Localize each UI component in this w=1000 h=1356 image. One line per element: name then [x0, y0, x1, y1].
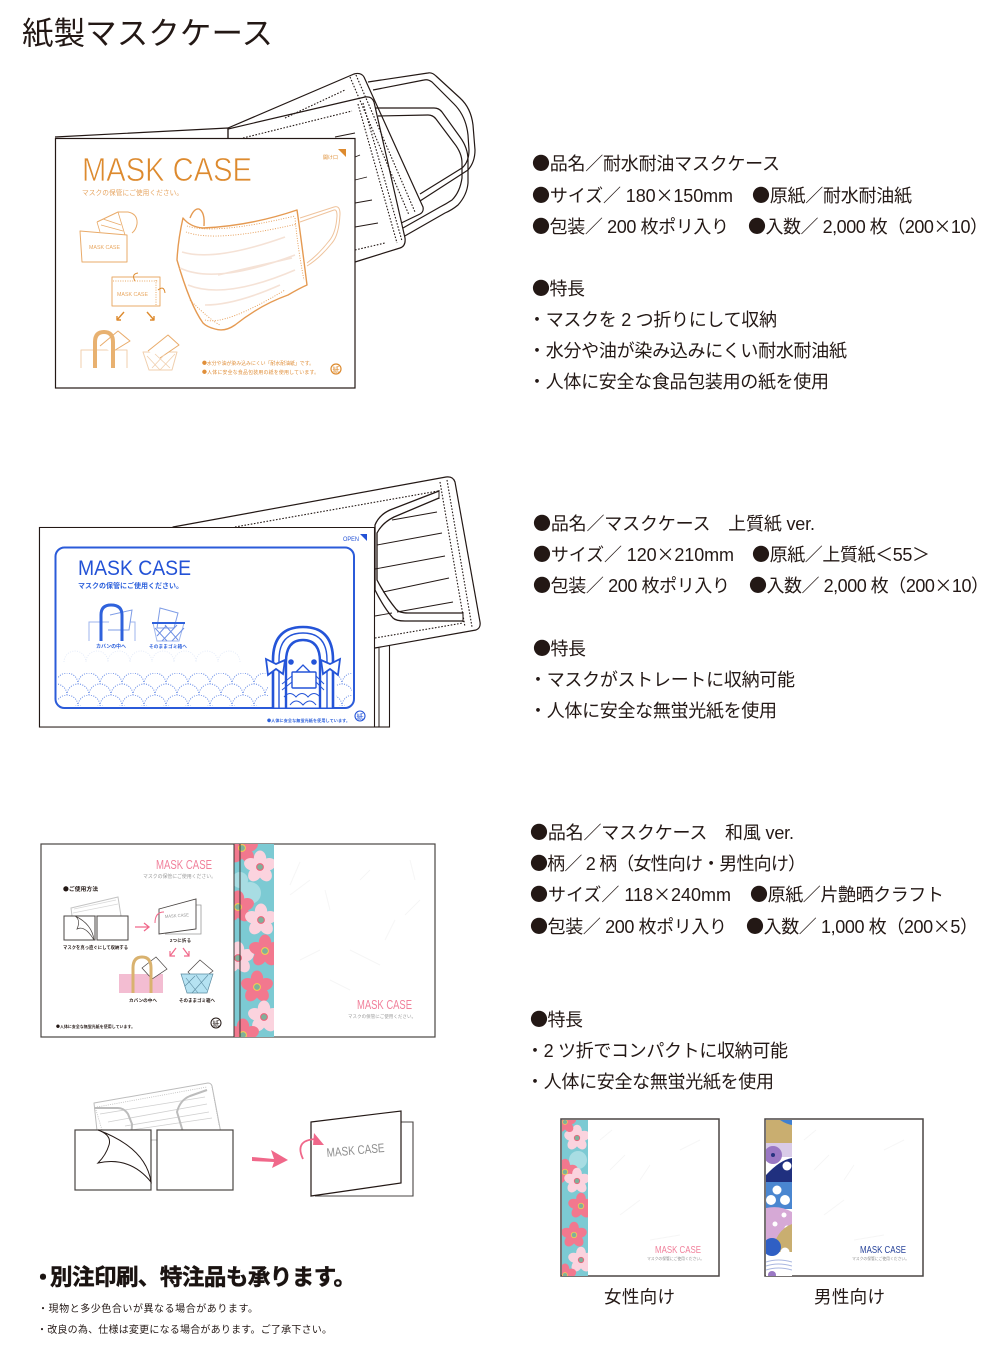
right sleeve [157, 1130, 233, 1190]
heading: MASK CASE (left): MASK CASE [156, 858, 212, 872]
section 1 illustration: waterproof mask case: MASK CASE [89, 245, 121, 251]
footnote: ●人体に安全な無蛍光紙を使用しています。 [267, 717, 350, 724]
how-to captions: マスクを真っ直ぐにして収納する [63, 944, 128, 951]
recycle mark: 紙 [212, 1019, 220, 1028]
back masks [55, 73, 475, 262]
bag icon [89, 605, 185, 641]
open label [343, 534, 367, 543]
section 2 specifications: ●入数／ 2,000 枚（200×10） [749, 572, 989, 598]
footnotes: ●人体に安全な食品包装用の紙を使用しています。 [202, 369, 319, 376]
recycle mark: 紙 [332, 365, 340, 374]
section 3 specifications: ●サイズ／ 118×240mm [530, 881, 731, 907]
bag captions: そのままゴミ箱へ [149, 643, 187, 650]
section 1 illustration: waterproof mask case [55, 73, 475, 388]
footnotes [202, 360, 319, 376]
disclaimers: ・改良の為、仕様は変更になる場合があります。ご了承下さい。 [37, 1323, 332, 1336]
section 1 specifications: ・マスクを 2 つ折りにして収納 [528, 310, 777, 330]
section 2 specifications: ●原紙／上質紙＜55＞ [752, 541, 930, 567]
disclaimers [37, 1302, 332, 1336]
section 1 specifications [528, 150, 988, 392]
heading: MASK CASE (right): MASK CASE [357, 998, 412, 1012]
section 2 specifications: ・マスクがストレートに収納可能 [529, 670, 795, 690]
section 3 specifications: ●特長 [530, 1006, 583, 1032]
mask behind case [173, 477, 480, 648]
section 3 specifications: ●原紙／片艶晒クラフト [750, 881, 944, 907]
how-to heading: ●ご使用方法 [63, 884, 98, 893]
how-to diagrams [64, 897, 213, 993]
arrow [252, 1150, 288, 1168]
women's version card: マスクの保管にご使用ください。 [647, 1256, 704, 1261]
how-to diagrams: MASK CASE [165, 912, 189, 919]
order note: 別注印刷、特注品も承ります。 [50, 1265, 356, 1290]
washi fibers [290, 860, 420, 990]
subheading: マスクの保管にご使用ください。 [78, 581, 183, 590]
section 2 specifications: ●サイズ／ 120×210mm [533, 541, 734, 567]
subheading (right): マスクの保管にご使用ください。 [348, 1013, 416, 1020]
disclaimers: ・現物と多少色合いが異なる場合があります。 [38, 1302, 258, 1315]
section 3 illustration: washi case open sheet [40, 843, 436, 1038]
section 3 specifications: ●包装／ 200 枚ポリ入り [530, 913, 727, 939]
section 1 specifications: ●入数／ 2,000 枚（200×10） [748, 213, 988, 239]
women's version card: MASK CASE [655, 1245, 701, 1256]
section 1 specifications: ・人体に安全な食品包装用の紙を使用 [528, 372, 829, 392]
amabie character [266, 627, 340, 708]
women's caption: 女性向け [604, 1287, 675, 1307]
section 2 specifications: ●包装／ 200 枚ポリ入り [533, 572, 730, 598]
open label: 開け口 [323, 155, 338, 161]
section 2 specifications [529, 510, 989, 721]
section 3 specifications: ・人体に安全な無蛍光紙を使用 [526, 1072, 774, 1092]
section 3 specifications: ●柄／ 2 柄（女性向け・男性向け） [530, 850, 806, 876]
folding diagram [75, 1083, 413, 1196]
folded case: MASK CASE [326, 1141, 385, 1160]
section 1 specifications: ●包装／ 200 枚ポリ入り [532, 213, 729, 239]
how-to captions: カバンの中へ [129, 997, 157, 1004]
bag captions [96, 643, 187, 650]
how-to captions: ●人体に安全な無蛍光紙を使用しています。 [56, 1024, 135, 1030]
grey mask [94, 1083, 222, 1142]
peeled corner [98, 1130, 151, 1182]
section 3 specifications: ●入数／ 1,000 枚（200×5） [746, 913, 978, 939]
folded case [300, 1111, 413, 1196]
how-to captions [56, 937, 216, 1030]
flower strip [234, 844, 274, 1037]
section 1 illustration: waterproof mask case: MASK CASE [117, 292, 149, 298]
left sleeve [75, 1130, 151, 1190]
case front [40, 528, 374, 727]
section 1 specifications: ●原紙／耐水耐油紙 [752, 182, 912, 208]
scallop pattern [58, 651, 352, 706]
order note: ・ [32, 1265, 54, 1290]
section 2 specifications: ●特長 [533, 635, 586, 661]
men's version card: マスクの保管にご使用ください。 [852, 1256, 909, 1261]
small how-to illustrations [80, 212, 179, 370]
blue frame [56, 548, 354, 708]
subheading: マスクの保管にご使用ください。 [82, 188, 183, 197]
case front [56, 138, 355, 388]
men's version card [763, 1119, 923, 1279]
open label [323, 149, 346, 161]
section 2 specifications: ●品名／マスクケース 上質紙 ver. [533, 510, 815, 536]
bag captions: カバンの中へ [96, 643, 126, 650]
recycle mark [211, 1018, 221, 1028]
recycle mark [355, 711, 365, 721]
section 2 specifications: ・人体に安全な無蛍光紙を使用 [529, 701, 777, 721]
recycle mark: 紙 [356, 712, 364, 721]
heading: MASK CASE: MASK CASE [82, 151, 252, 188]
section 1 specifications: ・水分や油が染み込みにくい耐水耐油紙 [528, 341, 847, 361]
section 1 specifications: ●特長 [532, 275, 585, 301]
how-to captions: そのままゴミ箱へ [179, 997, 216, 1004]
women's version card [560, 1118, 720, 1277]
heading: MASK CASE: MASK CASE [78, 557, 191, 580]
how-to captions: 2つに折る [170, 937, 191, 944]
section 2 illustration: wood-free paper case [40, 477, 480, 727]
section 1 specifications: ●品名／耐水耐油マスクケース [532, 150, 780, 176]
title: 紙製マスクケース [22, 15, 273, 51]
subheading (left): マスクの保管にご使用ください。 [143, 873, 216, 880]
recycle mark [331, 364, 341, 374]
section 3 specifications: ●品名／マスクケース 和風 ver. [530, 819, 794, 845]
open label: OPEN [343, 537, 359, 543]
section 3 specifications [526, 819, 978, 1092]
men's caption: 男性向け [814, 1287, 885, 1307]
men's version card: MASK CASE [860, 1245, 906, 1256]
section 3 specifications: ・2 ツ折でコンパクトに収納可能 [526, 1041, 788, 1061]
section 1 specifications: ●サイズ／ 180×150mm [532, 182, 733, 208]
footnotes: ●水分や油が染み込みにくい「耐水耐油紙」です。 [202, 360, 314, 367]
orange mask drawing [177, 207, 340, 330]
